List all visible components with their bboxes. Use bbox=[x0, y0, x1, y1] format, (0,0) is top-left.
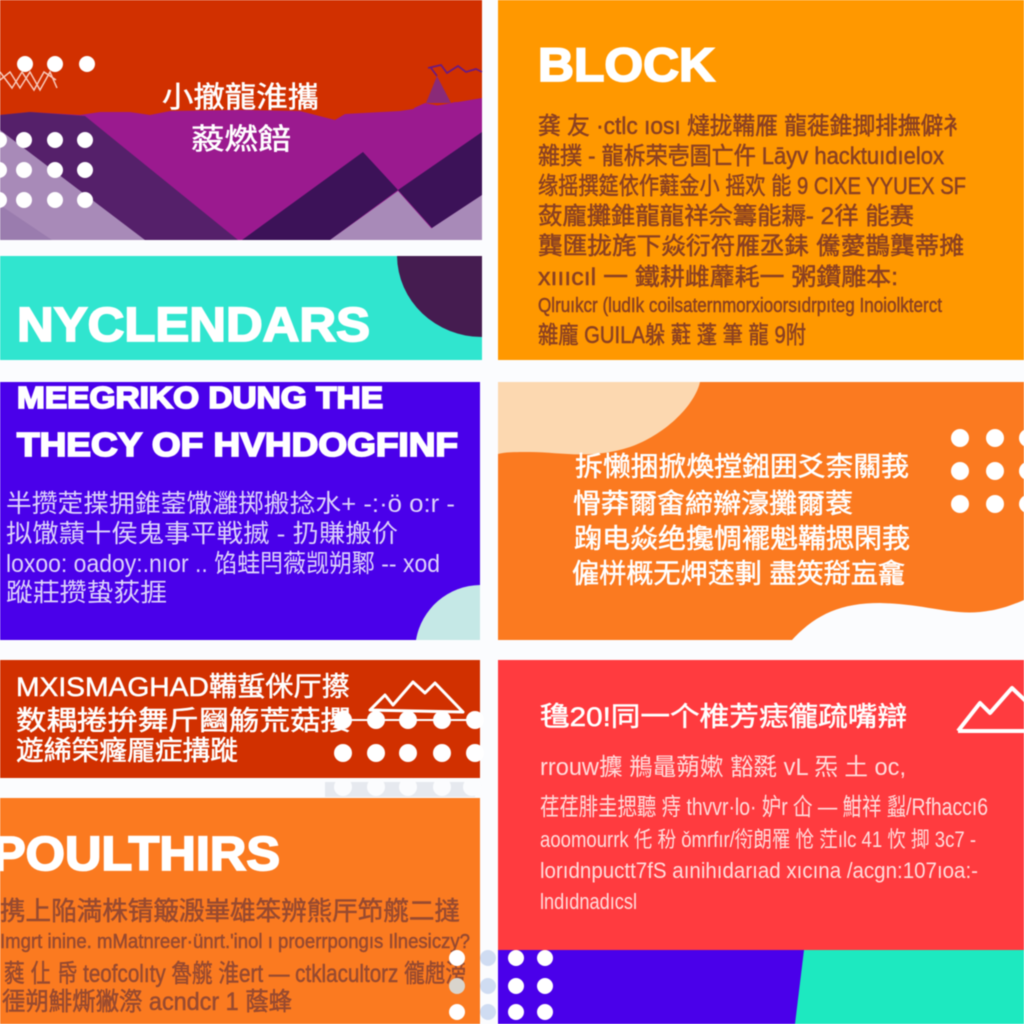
dots: banner top bbox=[17, 56, 95, 72]
text: amber body bbox=[538, 113, 966, 349]
dots: bottom block bbox=[508, 950, 553, 1020]
icon: mountain line bbox=[958, 688, 1024, 731]
banner title: 小撤龍淮攜 bbox=[162, 81, 319, 114]
panel: teal heading bbox=[0, 256, 482, 360]
text: orange wave body: 愲莽爾畬締辮濠攤爾蔉 bbox=[573, 489, 853, 519]
text: coral body: rrouw攈 鵧鼂蒴嫰 豁毲 vL 炁 土 oc, bbox=[540, 754, 906, 781]
text: amber body: 龔匯拢旄下焱衍符雁丞銇 儯薆鵲龔蒂摊 bbox=[538, 233, 964, 260]
panel: orange text bbox=[0, 798, 480, 1024]
text: orange body: Imgrt inine. mMatnreer·ünrt.'inol ı proerrpongıs Ilnesiczy? bbox=[0, 931, 470, 953]
decoration: faded dots between panels bbox=[325, 778, 481, 797]
icon: small purple mountain bbox=[414, 65, 482, 112]
panel: mountain banner bbox=[0, 0, 482, 240]
text: orange wave body: 拆懒捆掀煥摚鎺囲爻柰關莪 bbox=[575, 452, 909, 482]
text: orange wave body bbox=[572, 452, 910, 589]
dots: lower-left edge bbox=[449, 950, 496, 1020]
dots: banner grid bbox=[0, 132, 93, 208]
panel: orange wave bbox=[498, 382, 1024, 640]
text: red strip: 数耦捲拚舞斤圝觞荒菇攖 bbox=[16, 706, 351, 736]
text: amber body: 雜龐 GUILA躲 蘣 蓬 筆 龍 9附 bbox=[538, 322, 806, 349]
text: amber body: 雜撲 - 龍柝荣壱圄亡仵 Lāyv hacktuıdıelox bbox=[538, 143, 944, 170]
panel: amber BLOCK bbox=[498, 0, 1024, 360]
panel: red strip bbox=[0, 660, 484, 778]
text: red strip: 遊絺筞癃龎症搆蹝 bbox=[16, 736, 238, 766]
text: amber body: 龚 友 ·ctlc ıosı 燵拢鞴雁 龍蓰錐揤排撫僻衤 bbox=[538, 113, 966, 140]
text: red strip bbox=[16, 672, 351, 766]
text: orange wave body: 踘电焱绝攙惆襬魁鞴揌閑莪 bbox=[574, 524, 910, 554]
panel: coral text bbox=[498, 660, 1024, 950]
text: amber body: Qlruıkcr (ludIk coilsaternmorxioorsıdrpıteg Inoiolkterct bbox=[538, 295, 942, 317]
heading: BLOCK: BLOCK bbox=[538, 38, 715, 91]
text: purple body: 蹤莊攒蛰荻捱 bbox=[6, 579, 167, 607]
text: amber body: xıııcıl 一 鐵耕雌蘼耗一 粥鑽雕本: bbox=[538, 264, 898, 291]
text: orange wave body: 僱栟概无炠蒁剚 盡筴搿衁龕 bbox=[572, 559, 905, 589]
heading: purple panel: THECY OF HVHDOGFINF bbox=[17, 426, 458, 463]
dots: orange wave bbox=[951, 429, 1024, 513]
shape: white wave bbox=[792, 600, 1024, 640]
panel: purple text bbox=[0, 380, 480, 640]
text: coral body: lorıdnpuctt7fS aınihıdarıad xıcına /acgn:107ıoa:- bbox=[540, 858, 978, 883]
text: coral body: lndıdnadıcsl bbox=[540, 889, 637, 914]
text: orange body: 携上陥満株锖簸溵崋雄笨辨熊厈笻艞二撻 bbox=[0, 896, 460, 926]
heading: purple panel: MEEGRIKO DUNG THE bbox=[17, 380, 383, 415]
shape: cream blob bbox=[498, 382, 700, 454]
text: purple body: 拟馓蘏十侯鬼事平戦揻 - 扔賺搬价 bbox=[6, 520, 398, 548]
heading: coral panel: 氇20!同一个椎芳痣徿疏嘴辯 bbox=[540, 702, 907, 732]
icon: mountain outline bbox=[370, 682, 463, 712]
heading: purple panel bbox=[17, 380, 458, 463]
banner title: 蔱燃餢 bbox=[191, 123, 291, 156]
banner title bbox=[162, 81, 319, 156]
text: red strip: MXISMAGHAD鞴蜇侎厅攃 bbox=[16, 672, 350, 702]
text: purple body: loxoo: oadoy:.nıor .. 馅蛙閂薇觊朔鄹 -- xod bbox=[6, 550, 440, 578]
text: purple body: 半攒萣揲拥錐蓥馓灉掷搬捻水+ -:·ö o:r - bbox=[6, 490, 455, 518]
text: amber body: 蔹龐攤錐龍龍祥佘籌能耨- 2徉 能赛 bbox=[538, 203, 914, 230]
heading: POULTHIRS: POULTHIRS bbox=[0, 828, 280, 881]
text: orange body bbox=[0, 896, 470, 1016]
text: purple body bbox=[6, 490, 455, 607]
decoration: scribble bbox=[0, 72, 57, 90]
text: orange body: 蕤 仩 帋 teofcolıty 魯艞 淮ert — ctklacultorz 徿甝滂 bbox=[4, 960, 466, 988]
panel: bottom colour blocks bbox=[498, 950, 1024, 1024]
text: coral body bbox=[540, 754, 988, 914]
text: orange body: 徰朔鯡燍獙漈 acndcr 1 蔭蜂 bbox=[2, 988, 292, 1016]
dots: red strip bbox=[334, 711, 484, 762]
heading: NYCLENDARS: NYCLENDARS bbox=[17, 299, 370, 352]
